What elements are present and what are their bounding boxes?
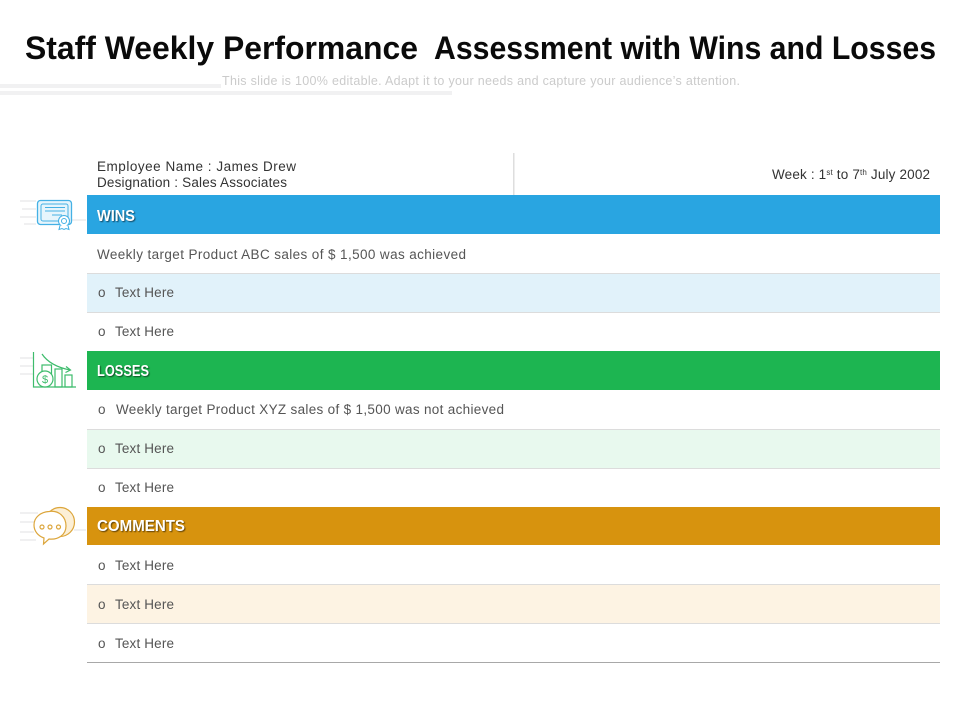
icon: declining chart	[20, 352, 76, 387]
losses row 2	[87, 429, 940, 468]
losses row 1: Weekly target Product XYZ sales of $ 1,500 was not achieved	[116, 402, 504, 417]
losses header: LOSSES	[97, 363, 149, 380]
icon: declining chart: $	[42, 374, 48, 386]
title: Assessment with Wins and Losses	[434, 30, 936, 66]
losses row 3: o	[98, 480, 106, 495]
icon: certificate	[20, 200, 86, 230]
comments row 3: o	[98, 636, 106, 651]
panel: wins	[87, 195, 940, 339]
comments header: COMMENTS	[97, 518, 185, 535]
comments row 2	[87, 585, 940, 624]
employee header	[97, 153, 930, 195]
losses row 1: o	[98, 402, 106, 417]
comments row 3: Text Here	[115, 636, 174, 651]
comments row 2: o	[98, 597, 106, 612]
week range: st	[826, 168, 833, 177]
employee details: Designation : Sales Associates	[97, 175, 287, 190]
comments row 2: Text Here	[115, 597, 174, 612]
panel: losses	[87, 351, 940, 495]
wins row 1	[87, 234, 940, 273]
wins row 1: Weekly target Product ABC sales of $ 1,500 was achieved	[97, 247, 466, 262]
employee details	[97, 159, 296, 190]
week range: Week : 1	[772, 167, 826, 182]
comments row 1: Text Here	[115, 558, 174, 573]
wins row 2: Text Here	[115, 285, 174, 300]
losses row 2: Text Here	[115, 441, 174, 456]
comments row 1: o	[98, 558, 106, 573]
icon: speech bubbles	[20, 508, 86, 544]
losses header	[87, 351, 940, 390]
wins row 3: o	[98, 324, 106, 339]
wins header	[87, 195, 940, 234]
subtitle: This slide is 100% editable. Adapt it to your needs and capture your audience’s attention.	[222, 74, 740, 88]
wins row 3: Text Here	[115, 324, 174, 339]
title	[25, 30, 936, 66]
title accent bars	[0, 84, 452, 95]
comments header	[87, 507, 940, 545]
panel: comments	[87, 507, 940, 651]
title: Staff Weekly Performance	[25, 30, 418, 66]
losses row 3: Text Here	[115, 480, 174, 495]
losses row 2: o	[98, 441, 106, 456]
week range: July 2002	[867, 167, 930, 182]
wins header: WINS	[97, 208, 135, 225]
wins row 2: o	[98, 285, 106, 300]
wins row 2	[87, 273, 940, 312]
week range: to 7	[833, 167, 860, 182]
week range: th	[860, 168, 867, 177]
employee details: Employee Name : James Drew	[97, 159, 296, 174]
